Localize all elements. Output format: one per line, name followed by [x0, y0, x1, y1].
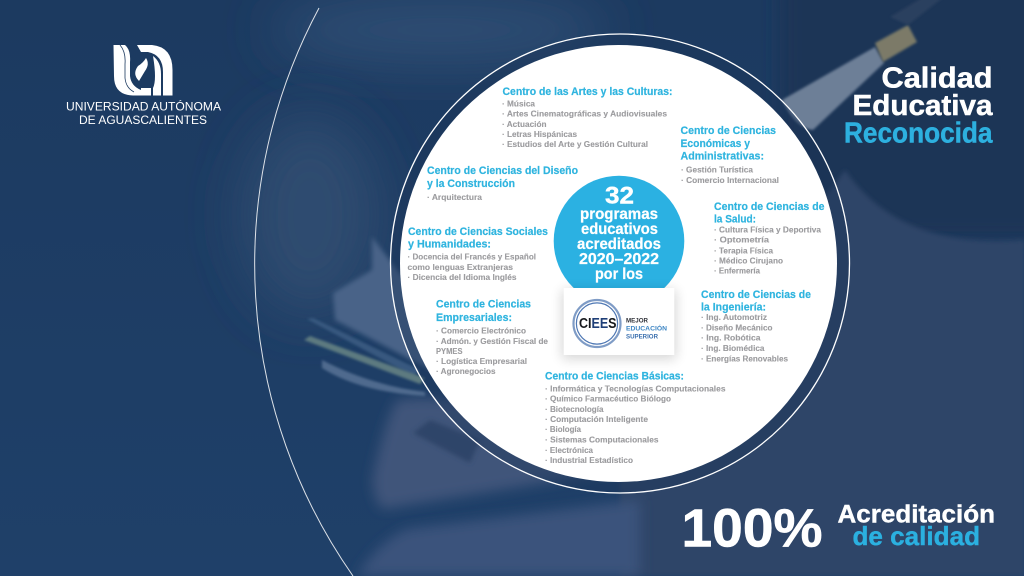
panel: Ciencias Económicas y Administrativas: Económicas y — [680, 138, 751, 150]
panel: Ingeniería: la Ingeniería: — [701, 302, 766, 314]
callout: 32 programas educativos — [554, 176, 684, 306]
panel: Artes y Culturas: · Actuación — [502, 119, 546, 129]
panel: Sociales y Humanidades — [408, 226, 548, 282]
logo card: CIEES: CIEES — [579, 316, 617, 332]
panel: Empresariales: Empresariales: — [436, 312, 512, 324]
pencil — [782, 0, 945, 130]
panel: Salud: · Terapia Física — [714, 245, 773, 255]
panel: Salud — [714, 201, 824, 276]
heading: Calidad Educativa Reconocida: Educativa — [852, 90, 993, 122]
logo card: CIEES: MEJOR — [626, 318, 648, 324]
callout: 32 programas educativos: educativos — [581, 221, 658, 238]
panel: Diseño y Construcción: y la Construcción — [427, 178, 515, 190]
panel: Básicas: · Biotecnología — [545, 404, 604, 414]
panel: Artes y Culturas: Centro de las Artes y las Culturas: — [502, 86, 672, 98]
panel: Diseño y Construcción — [427, 165, 578, 202]
heading: Calidad Educativa Reconocida: Calidad — [882, 62, 992, 94]
panel: Ciencias Económicas y Administrativas — [680, 125, 779, 185]
panel: Empresariales: · Agronegocios — [436, 366, 496, 376]
outer ring — [390, 34, 850, 493]
panel: Ingeniería: · Diseño Mecánico — [701, 322, 772, 332]
panel: Artes y Culturas: · Música — [502, 98, 535, 108]
panel: Ingeniería: · Ing. Automotriz — [701, 312, 767, 322]
panel: Ingeniería: Centro de Ciencias de — [701, 289, 811, 301]
panel: Ciencias Económicas y Administrativas: · Gestión Turística — [681, 164, 753, 174]
stat: 100% acreditación de calidad — [682, 498, 995, 558]
icon: UAA emblem — [114, 45, 172, 96]
panel: Salud: la Salud: — [714, 214, 756, 226]
panel: Empresariales: · Admón. y Gestión Fiscal de — [436, 336, 548, 346]
panel: Empresariales: · Comercio Electrónico — [436, 326, 526, 336]
panel: Ciencias Económicas y Administrativas: Centro de Ciencias — [680, 125, 776, 137]
panel: Empresariales — [436, 299, 548, 376]
stat: 100% acreditación de calidad: de calidad — [852, 521, 980, 551]
panel: Artes y Culturas: · Letras Hispánicas — [502, 129, 577, 139]
panel: Salud: · Optometría — [714, 235, 769, 245]
panel: Ingeniería: · Energías Renovables — [701, 353, 788, 363]
logo: Universidad Autónoma de Aguascalientes: DE AGUASCALIENTES — [79, 115, 207, 127]
panel: Sociales y Humanidades: y Humanidades: — [408, 238, 491, 250]
panel: Ingeniería: · Ing. Robótica — [701, 333, 761, 343]
thin outer arc — [255, 8, 353, 576]
logo: Universidad Autónoma de Aguascalientes — [66, 45, 221, 127]
panel: Salud: · Enfermería — [714, 266, 760, 276]
panel: Básicas: · Sistemas Computacionales — [545, 434, 659, 444]
panel: Básicas: Centro de Ciencias Básicas: — [545, 370, 684, 382]
panel: Empresariales: · Logística Empresarial — [436, 356, 527, 366]
panel: Básicas: · Químico Farmacéutico Biólogo — [545, 394, 671, 404]
callout: 32 programas educativos: por los — [595, 266, 643, 283]
panel: Ciencias Económicas y Administrativas: Administrativas: — [680, 150, 764, 162]
panel: Básicas: · Informática y Tecnologías Computacionales — [545, 384, 726, 394]
panel: Básicas: · Biología — [545, 424, 581, 434]
panel: Básicas: · Electrónica — [545, 445, 593, 455]
panel: Sociales y Humanidades: como lenguas Extranjeras — [408, 262, 513, 272]
icon: CIEES ring — [574, 300, 620, 347]
panel: Empresariales: Centro de Ciencias — [436, 299, 531, 311]
panel: Ciencias Económicas y Administrativas: · Comercio Internacional — [681, 175, 779, 185]
panel: Básicas — [545, 370, 726, 465]
callout: 32 programas educativos: 2020–2022 — [579, 251, 659, 268]
main white circle panel — [400, 45, 837, 482]
heading: Calidad Educativa Reconocida: Reconocida — [844, 118, 993, 150]
panel: Empresariales: PYMES — [436, 346, 463, 356]
callout: 32 programas educativos: acreditados — [577, 236, 661, 253]
panel: Artes y Culturas — [502, 86, 672, 149]
callout: 32 programas educativos: programas — [580, 206, 658, 223]
stat: 100% acreditación de calidad: Acreditación — [838, 500, 995, 528]
panel: Sociales y Humanidades: · Dicencia del Idioma Inglés — [408, 272, 517, 282]
panel: Sociales y Humanidades: · Docencia del Francés y Español — [408, 252, 536, 262]
panel: Ingeniería: · Ing. Biomédica — [701, 343, 765, 353]
panel: Diseño y Construcción: · Arquitectura — [427, 192, 482, 202]
panel: Básicas: · Computación Inteligente — [545, 414, 648, 424]
panel: Salud: Centro de Ciencias de — [714, 201, 824, 213]
logo card: CIEES: EDUCACIÓN — [626, 324, 667, 332]
heading: Calidad Educativa Reconocida — [844, 62, 993, 150]
panel: Ingeniería — [701, 289, 811, 363]
panel: Sociales y Humanidades: Centro de Ciencias Sociales — [408, 226, 548, 238]
panel: Artes y Culturas: · Artes Cinematográficas y Audiovisuales — [502, 108, 667, 118]
stat: 100% acreditación de calidad: 100% — [682, 498, 822, 558]
logo wordmark: UNIVERSIDAD AUTÓNOMA — [66, 100, 221, 114]
panel: Básicas: · Industrial Estadístico — [545, 455, 633, 465]
logo card: CIEES — [562, 288, 676, 359]
logo card: CIEES: SUPERIOR — [626, 334, 658, 340]
callout: 32 programas educativos: 32 — [605, 182, 634, 210]
panel: Salud: · Médico Cirujano — [714, 256, 783, 266]
panel: Salud: · Cultura Física y Deportiva — [714, 224, 821, 234]
panel: Diseño y Construcción: Centro de Ciencias del Diseño — [427, 165, 578, 177]
panel: Artes y Culturas: · Estudios del Arte y Gestión Cultural — [502, 139, 648, 149]
